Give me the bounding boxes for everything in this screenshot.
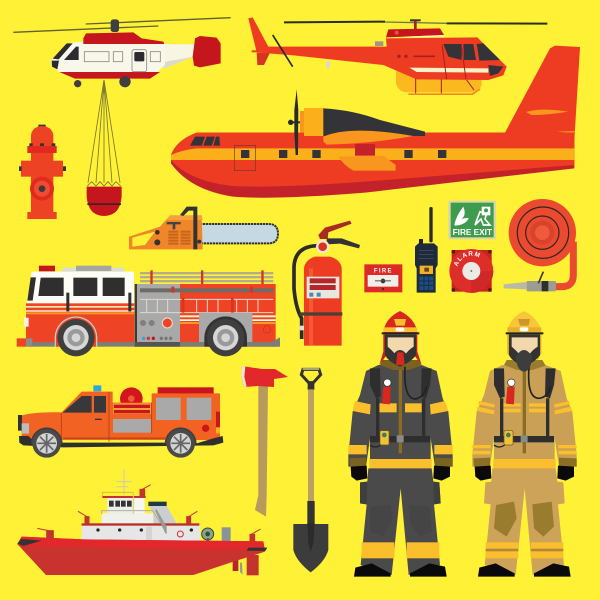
fire call point box: FIRE [374,269,393,275]
fire exit sign: FIRE EXIT [453,227,493,237]
alarm bell: ALARM [454,251,480,266]
fire extinguisher [294,221,360,346]
helicopter: red with yellow belly [248,17,547,95]
fire call point box [364,264,402,292]
water bomber plane [171,46,580,198]
pickup fire engine [18,385,223,458]
walkie talkie radio [415,207,438,293]
fire hose reel [504,199,576,291]
helicopter: white and red with rotor [13,18,231,87]
water bucket on cables [87,80,122,216]
fire exit sign [448,201,496,239]
fire boat [17,469,267,575]
fire hydrant [19,125,66,219]
shovel [293,368,328,572]
fire truck [17,266,280,356]
alarm bell [449,249,494,293]
chainsaw [129,207,278,249]
firefighter: tan uniform [472,311,577,577]
axe [241,366,288,517]
firefighter: dark uniform [348,311,453,577]
